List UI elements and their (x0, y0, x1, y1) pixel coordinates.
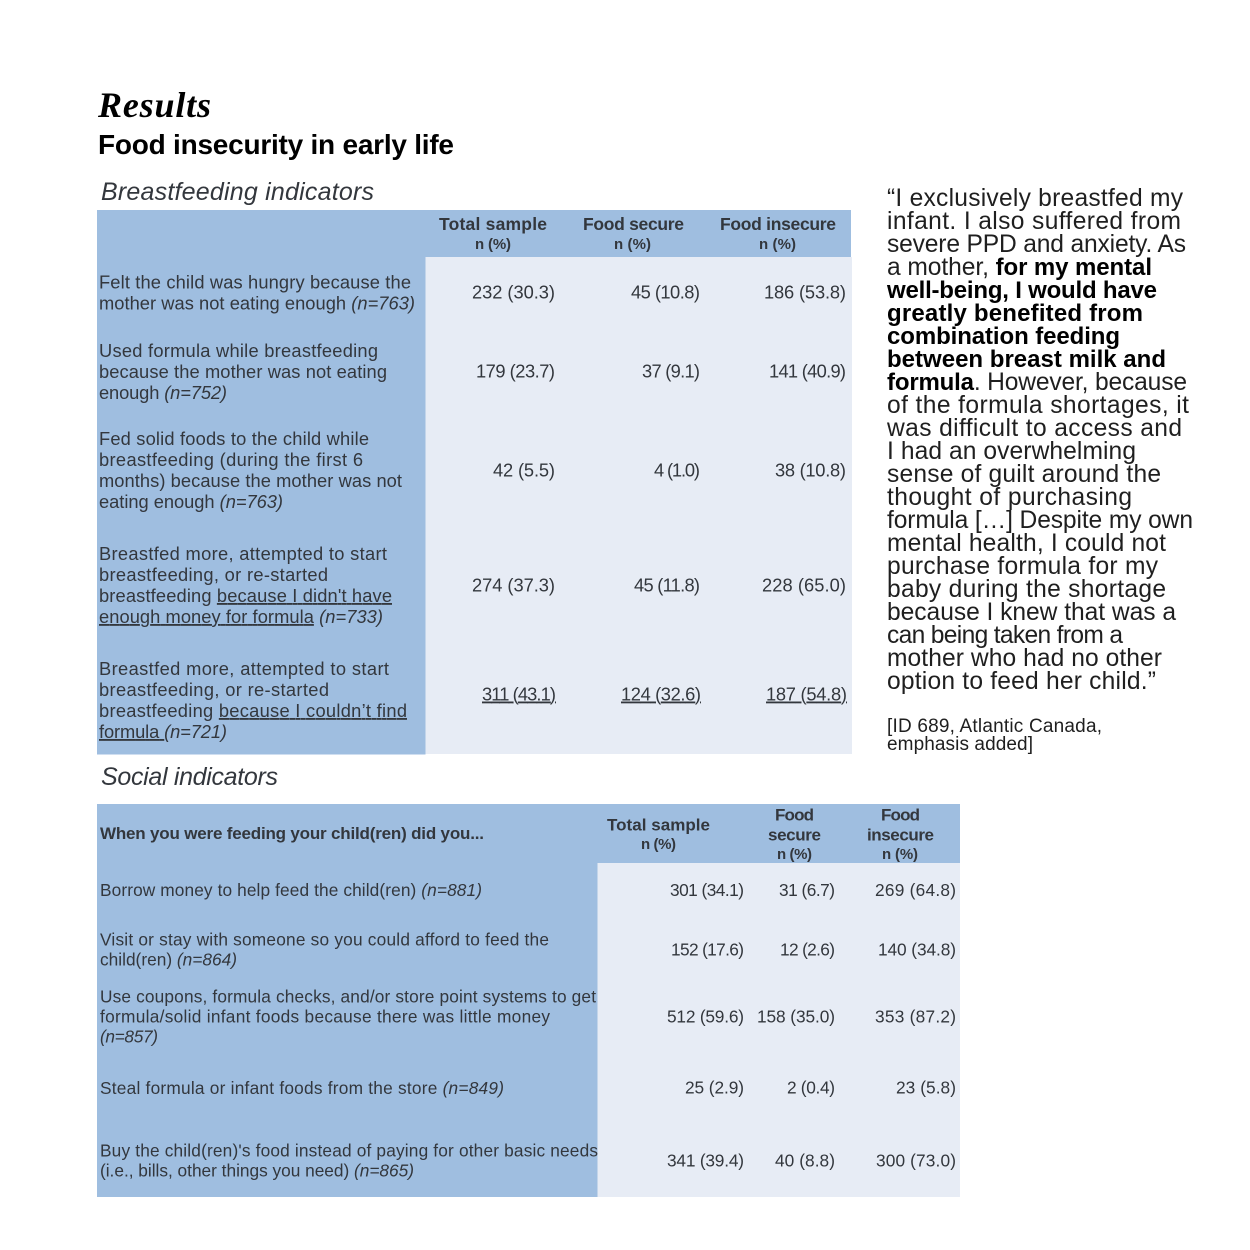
row: fed solid foods: breastfeeding (during the first 6 (99, 449, 363, 470)
row: breastfed more, no money for formula (99, 543, 846, 627)
row: breastfed more, could not find formula: 124 (32.6) (621, 684, 701, 704)
column header: food insecure: insecure (867, 826, 934, 844)
row: steal formula: 25 (2.9) (685, 1078, 744, 1098)
row: breastfed more, could not find formula: 187 (54.8) (766, 684, 847, 704)
row: used formula while breastfeeding: 37 (9.1) (642, 360, 700, 382)
table background: social (97, 804, 960, 1197)
column header: food insecure: Food (881, 806, 920, 824)
column header: total sample: Total sample (439, 214, 547, 234)
quote: participant statement: well-being, I would have (886, 277, 1157, 304)
row: breastfed more, no money for formula: 274 (37.3) (472, 574, 555, 596)
quote: participant statement: because I knew that was a (887, 599, 1176, 626)
column header: food secure: n (%) (614, 236, 651, 253)
row: used formula while breastfeeding (99, 340, 846, 403)
row: fed solid foods: 4 (1.0) (654, 460, 700, 480)
column header: food secure: Food (775, 806, 814, 824)
row: steal formula: 23 (5.8) (896, 1078, 956, 1098)
row: use coupons: 512 (59.6) (667, 1006, 744, 1026)
row: breastfed more, could not find formula: Breastfed more, attempted to start (99, 658, 389, 679)
column header: food insecure (720, 214, 836, 253)
column header: food insecure (867, 806, 934, 863)
row: visit or stay with someone: Visit or stay with someone so you could afford to feed the (100, 930, 549, 950)
heading: Breastfeeding indicators: Breastfeeding indicators (101, 178, 374, 206)
row: breastfed more, could not find formula: formula (n=721) (99, 721, 227, 742)
row: borrow money: 269 (64.8) (875, 880, 956, 900)
row: felt the child was hungry: 45 (10.8) (631, 282, 700, 302)
row: breastfed more, no money for formula: Breastfed more, attempted to start (99, 543, 387, 564)
row: buy the child's food: Buy the child(ren)'s food instead of paying for other basic needs (100, 1140, 598, 1160)
quote: participant statement: greatly benefited from (887, 300, 1143, 327)
row: steal formula: 2 (0.4) (787, 1078, 835, 1098)
row: breastfed more, could not find formula: breastfeeding, or re-started (99, 679, 329, 700)
row: used formula while breastfeeding: 179 (23.7) (476, 360, 555, 382)
quote: participant statement: formula […] Despite my own (887, 507, 1193, 534)
row: breastfed more, no money for formula: breastfeeding, or re-started (99, 564, 328, 585)
row: fed solid foods (99, 428, 846, 512)
quote citation: [ID 689, Atlantic Canada, (887, 716, 1102, 737)
row: felt the child was hungry (99, 272, 846, 314)
row: used formula while breastfeeding: Used formula while breastfeeding (99, 340, 378, 361)
row: fed solid foods: Fed solid foods to the child while (99, 428, 369, 449)
quote: participant statement: purchase formula for my (887, 553, 1159, 580)
row: steal formula (100, 1078, 956, 1098)
quote: participant statement: can being taken from a (887, 622, 1123, 649)
quote: participant statement: severe PPD and anxiety. As (887, 231, 1186, 258)
heading: Food insecurity in early life: Food insecurity in early life (98, 129, 454, 160)
column header: total sample (439, 214, 547, 253)
row: breastfed more, no money for formula: 228 (65.0) (762, 574, 846, 596)
quote: participant statement: “I exclusively breastfed my (887, 185, 1184, 212)
quote: participant statement: option to feed her child.” (887, 668, 1156, 695)
column header: food insecure: Food insecure (720, 214, 836, 234)
row: visit or stay with someone: 140 (34.8) (878, 940, 956, 960)
row: use coupons: 158 (35.0) (757, 1006, 835, 1026)
row: use coupons: 353 (87.2) (875, 1006, 956, 1026)
row: buy the child's food: (i.e., bills, other things you need) (n=865) (100, 1160, 414, 1180)
row: buy the child's food: 300 (73.0) (876, 1150, 956, 1170)
quote: participant statement (886, 185, 1193, 695)
row: felt the child was hungry: mother was not eating enough (n=763) (99, 292, 415, 314)
row: visit or stay with someone: 12 (2.6) (780, 940, 835, 960)
row: buy the child's food: 40 (8.8) (775, 1150, 835, 1170)
row: fed solid foods: months) because the mother was not (99, 470, 402, 491)
panel: social indicators table (97, 804, 960, 1197)
quote citation (887, 716, 1102, 755)
quote: participant statement: I had an overwhelming (887, 438, 1136, 465)
quote: participant statement: infant. I also suffered from (887, 208, 1181, 235)
quote: participant statement: combination feeding (887, 323, 1120, 350)
row: use coupons: formula/solid infant foods because there was little money (100, 1006, 550, 1026)
column header: food secure: secure (768, 826, 821, 844)
quote: participant statement: between breast milk and (887, 346, 1166, 373)
heading: Social indicators: Social indicators (101, 763, 278, 791)
row: used formula while breastfeeding: 141 (40.9) (769, 360, 846, 382)
row: borrow money: Borrow money to help feed the child(ren) (n=881) (100, 880, 482, 900)
row: borrow money: 31 (6.7) (779, 880, 835, 900)
column header: food insecure: n (%) (759, 236, 796, 253)
table question header: When you were feeding your child(ren) did you... (100, 824, 484, 843)
row: breastfed more, no money for formula: breastfeeding because I didn't have (99, 585, 392, 606)
column header: food secure: Food secure (583, 214, 684, 234)
column header: food secure (768, 806, 821, 863)
row: breastfed more, could not find formula: breastfeeding because I couldn’t find (99, 700, 407, 721)
row: breastfed more, no money for formula: enough money for formula (n=733) (99, 606, 383, 627)
quote: participant statement: mother who had no other (887, 645, 1162, 672)
row: breastfed more, no money for formula: 45 (11.8) (634, 574, 700, 596)
quote: participant statement: was difficult to access and (886, 415, 1182, 442)
row: use coupons: Use coupons, formula checks, and/or store point systems to get (100, 986, 596, 1006)
row: borrow money (100, 880, 956, 900)
row: used formula while breastfeeding: enough (n=752) (99, 382, 227, 403)
row: buy the child's food (100, 1140, 956, 1180)
panel: breastfeeding indicators table (97, 210, 852, 754)
row: visit or stay with someone (100, 930, 956, 970)
row: visit or stay with someone: 152 (17.6) (671, 940, 744, 960)
row: breastfed more, could not find formula: 311 (43.1) (482, 684, 556, 704)
column header: total sample: n (%) (641, 836, 676, 853)
row: fed solid foods: 38 (10.8) (775, 460, 846, 480)
row: used formula while breastfeeding: because the mother was not eating (99, 361, 387, 382)
title: Results: Results (97, 85, 211, 125)
column header: food secure: n (%) (777, 846, 812, 863)
quote: participant statement: formula. However, because (887, 369, 1187, 396)
row: felt the child was hungry: 186 (53.8) (764, 282, 846, 302)
quote: participant statement: sense of guilt around the (887, 461, 1161, 488)
quote: participant statement: thought of purchasing (887, 484, 1132, 511)
column header: total sample: Total sample (607, 816, 710, 834)
quote citation: emphasis added] (887, 734, 1033, 755)
row: steal formula: Steal formula or infant foods from the store (n=849) (100, 1078, 504, 1098)
quote: participant statement: a mother, for my mental (887, 254, 1152, 281)
column header: total sample: n (%) (475, 236, 511, 253)
row: use coupons (100, 986, 956, 1046)
quote: participant statement: mental health, I could not (887, 530, 1166, 557)
quote: participant statement: of the formula shortages, it (887, 392, 1189, 419)
quote: participant statement: baby during the shortage (887, 576, 1166, 603)
row: felt the child was hungry: Felt the child was hungry because the (99, 272, 411, 292)
row: visit or stay with someone: child(ren) (n=864) (100, 950, 237, 970)
row: felt the child was hungry: 232 (30.3) (472, 282, 555, 302)
row: fed solid foods: eating enough (n=763) (99, 491, 283, 512)
column header: food secure (583, 214, 684, 253)
table background: breastfeeding (97, 210, 852, 754)
row: use coupons: (n=857) (100, 1026, 158, 1046)
column header: total sample (607, 816, 710, 853)
column header: food insecure: n (%) (882, 846, 918, 863)
row: borrow money: 301 (34.1) (670, 880, 744, 900)
row: buy the child's food: 341 (39.4) (667, 1150, 744, 1170)
row: fed solid foods: 42 (5.5) (493, 460, 555, 480)
row: breastfed more, could not find formula (99, 658, 847, 742)
